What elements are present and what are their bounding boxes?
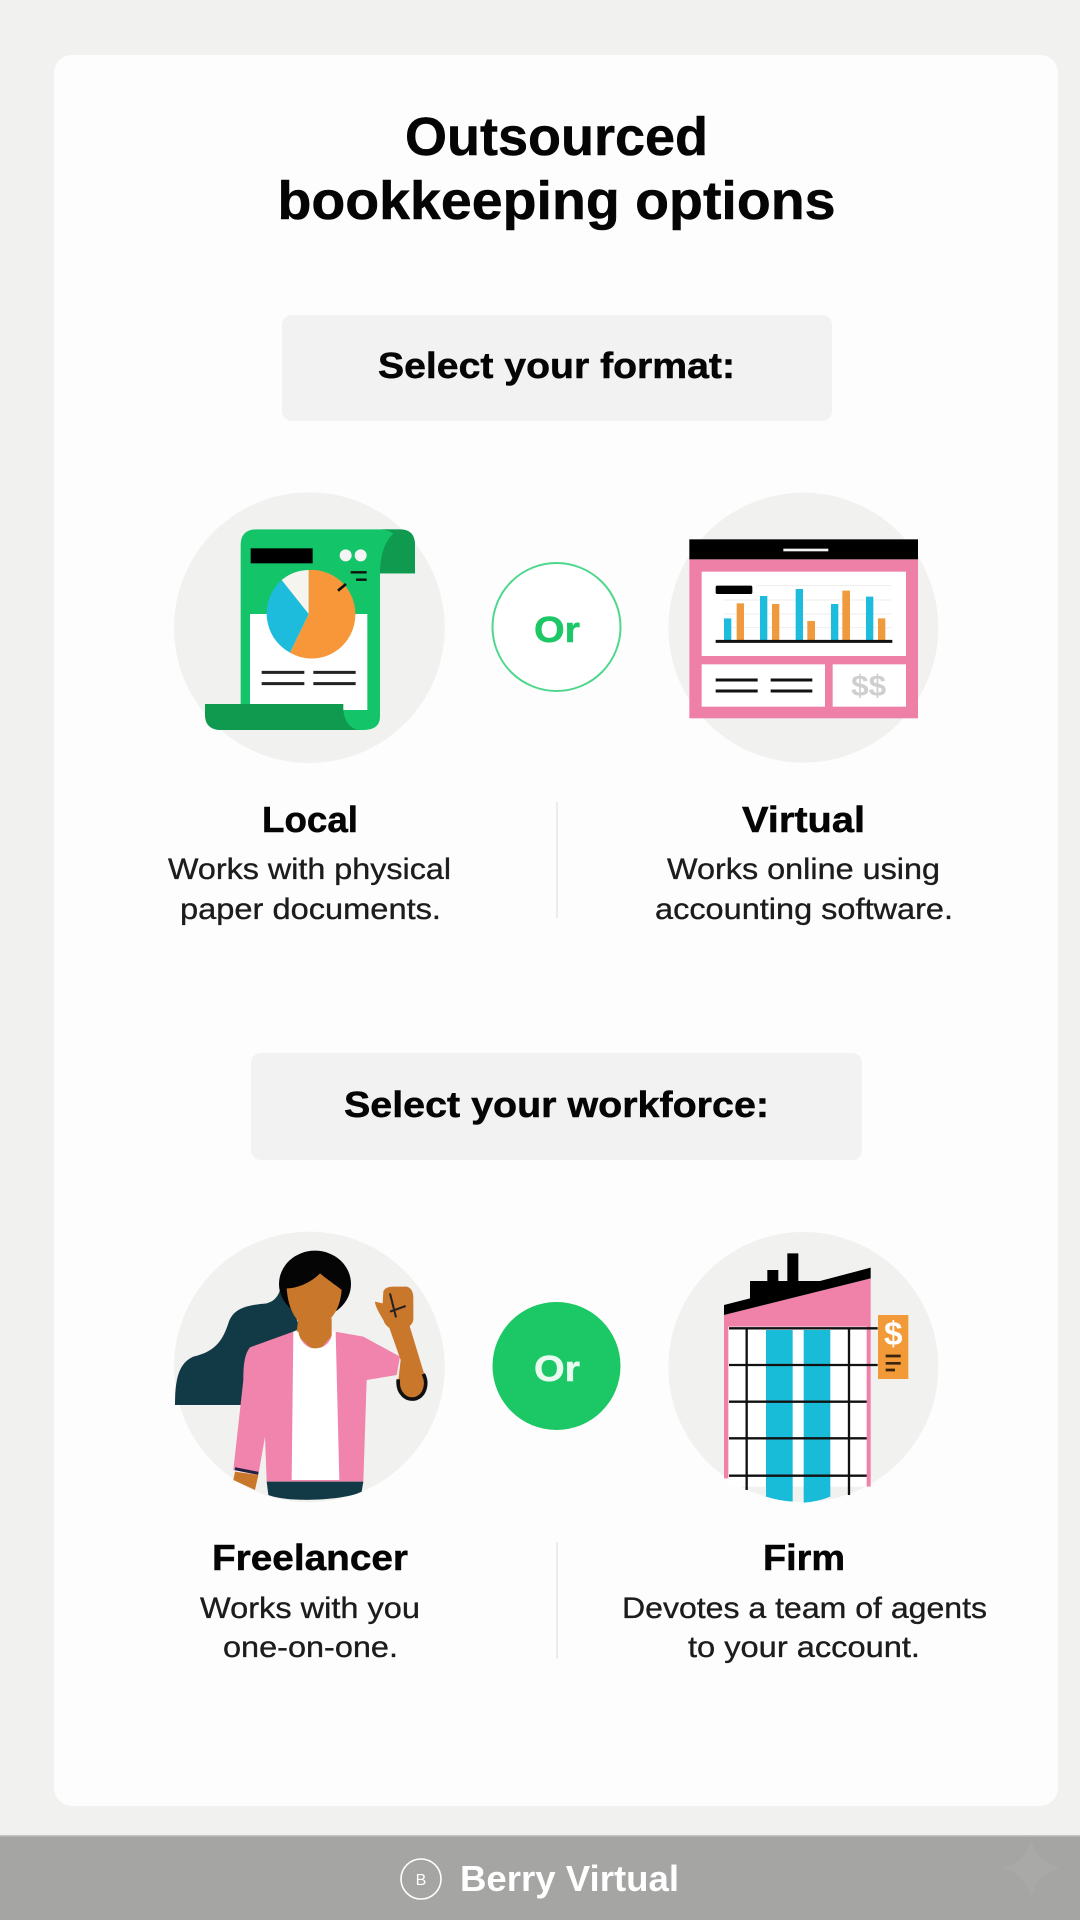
text: virtual: Works online using — [667, 853, 940, 886]
text: firm: Firm — [763, 1537, 845, 1578]
text: freelancer: Freelancer — [212, 1537, 408, 1578]
or badge filled — [492, 1302, 620, 1430]
title — [278, 107, 836, 231]
footer bar — [0, 1835, 1080, 1920]
icon: firm building — [668, 1232, 938, 1503]
text: freelancer — [200, 1537, 420, 1664]
text: local: paper documents. — [180, 893, 441, 926]
icon: local paper document — [174, 492, 445, 763]
text: firm: Devotes a team of agents — [622, 1592, 987, 1625]
heading: select your workforce — [251, 1053, 862, 1160]
text: local — [168, 799, 451, 926]
text: local: Works with physical — [168, 853, 451, 886]
or badge outlined — [492, 563, 620, 691]
text: firm: to your account. — [688, 1631, 920, 1664]
heading: select your format: Select your format: — [378, 345, 735, 386]
text: virtual — [655, 799, 953, 926]
footer logo: B — [416, 1872, 426, 1889]
icon: virtual software screen: $$ — [851, 670, 886, 703]
footer brand name: Berry Virtual — [460, 1858, 679, 1899]
footer logo — [401, 1859, 441, 1899]
text: virtual: accounting software. — [655, 893, 953, 926]
text: virtual: Virtual — [742, 799, 865, 840]
icon: firm building: $ — [884, 1316, 903, 1353]
icon: freelancer woman — [174, 1232, 445, 1502]
text: freelancer: one-on-one. — [223, 1631, 398, 1664]
heading: select your workforce: Select your workforce: — [344, 1084, 769, 1125]
text: firm — [622, 1537, 987, 1664]
or badge outlined: Or — [534, 609, 580, 650]
text: local: Local — [262, 799, 358, 840]
or badge filled: Or — [534, 1348, 580, 1389]
icon: virtual software screen — [668, 493, 938, 763]
title: bookkeeping options — [278, 171, 836, 231]
heading: select your format — [282, 315, 832, 421]
text: freelancer: Works with you — [200, 1592, 420, 1625]
title: Outsourced — [405, 107, 708, 167]
